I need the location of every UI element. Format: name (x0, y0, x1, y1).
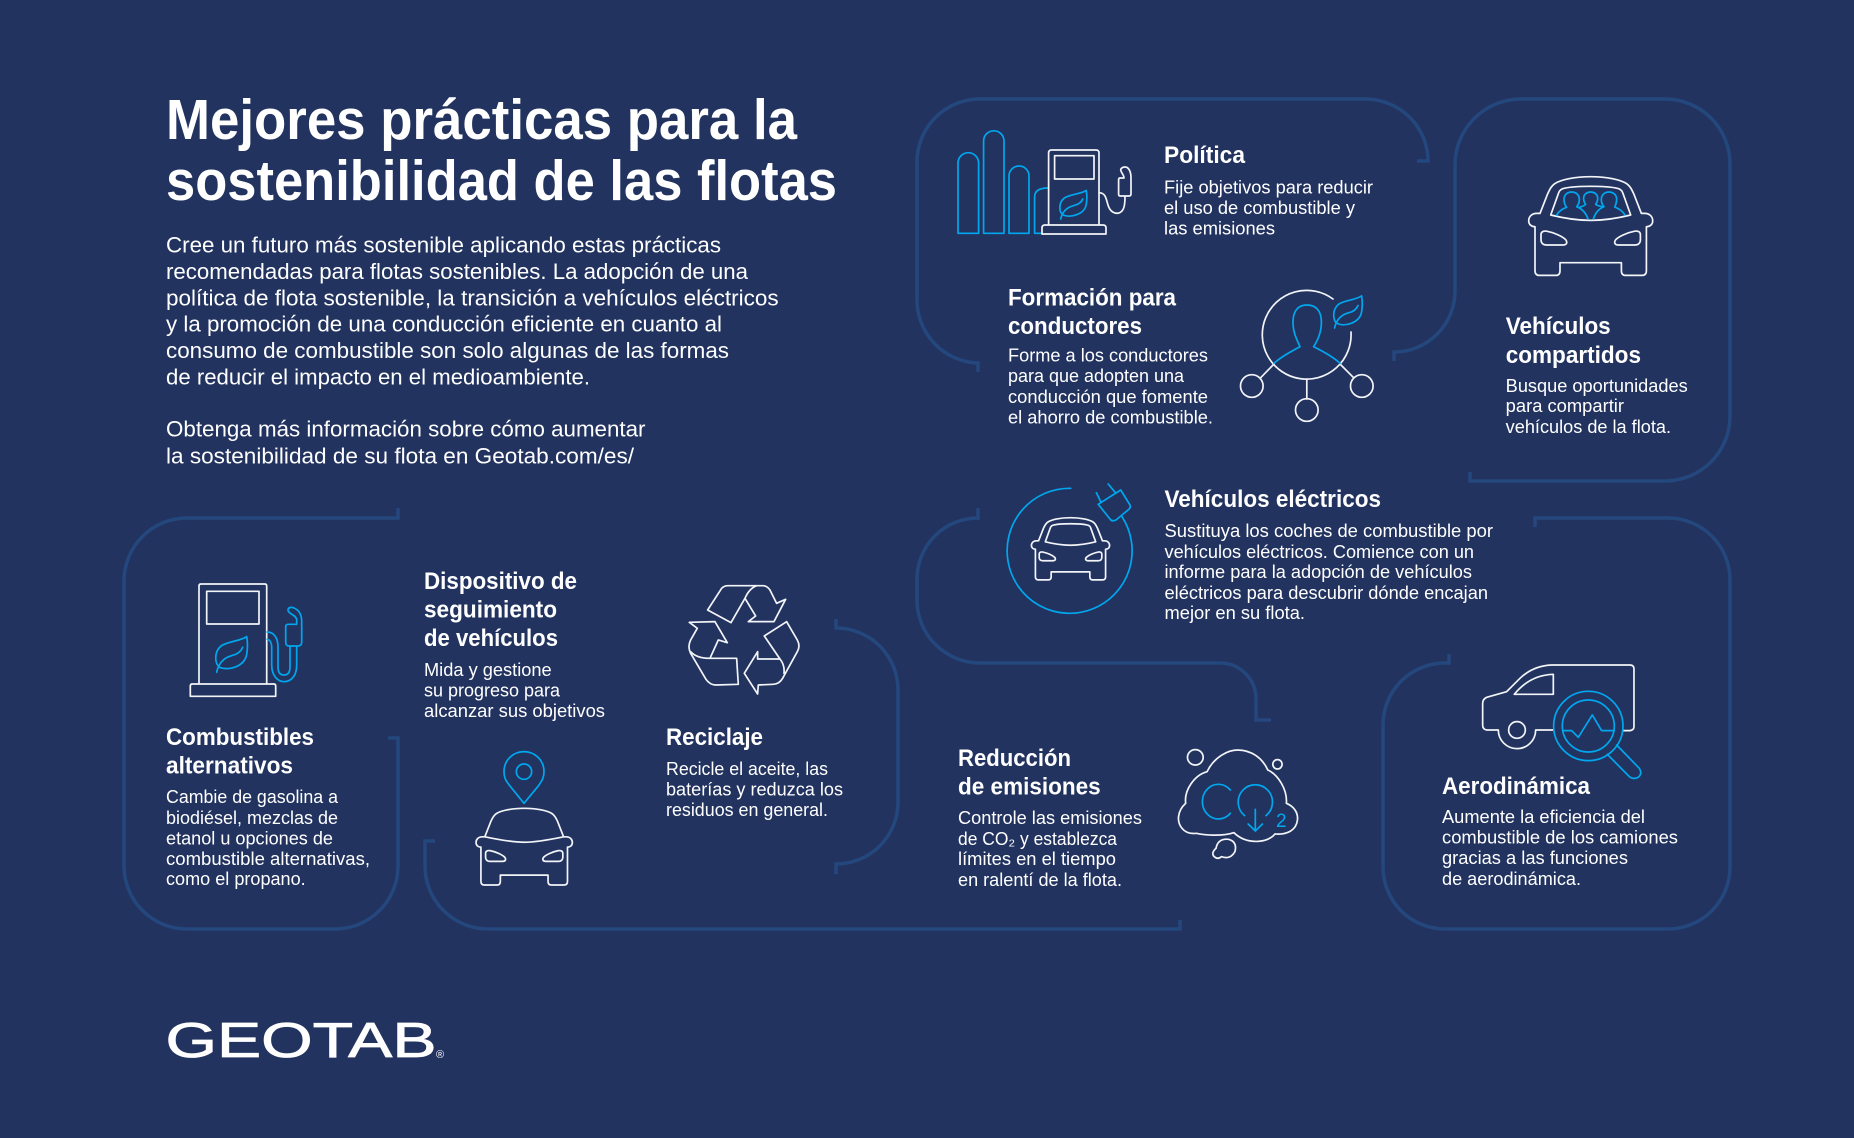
icon: car with location pin (476, 752, 572, 885)
icon: CO2 cloud: 2 (1276, 811, 1287, 832)
body text: límites en el tiempo (958, 849, 1116, 869)
body text (1442, 807, 1678, 889)
body text (1008, 346, 1213, 428)
body text: Cambie de gasolina a (166, 787, 339, 807)
heading (1008, 285, 1177, 340)
panel: combustibles alternativos (166, 584, 370, 889)
body text: etanol u opciones de (166, 828, 333, 848)
body text: su progreso para (424, 680, 561, 700)
body text: mejor en su flota. (1164, 603, 1305, 623)
body text: vehículos eléctricos. Comience con un (1164, 542, 1474, 562)
icon: bars and fuel pump (958, 131, 1131, 234)
intro text block (166, 233, 779, 468)
panel frame: combustibles alternativos (124, 508, 398, 929)
body text: Mida y gestione (424, 660, 552, 680)
body text (424, 660, 605, 721)
intro text block: de reducir el impacto en el medioambiente. (166, 365, 590, 390)
panel: vehículos compartidos (1506, 177, 1688, 437)
heading (958, 745, 1101, 801)
heading: Vehículos (1506, 313, 1611, 340)
panel: aerodinámica (1442, 665, 1678, 889)
intro text block: Obtenga más información sobre cómo aumentar (166, 417, 646, 442)
intro text block: y la promoción de una conducción eficiente en cuanto al (166, 312, 722, 337)
body text: combustible alternativas, (166, 849, 370, 869)
heading: compartidos (1506, 342, 1641, 369)
panel frame: reciclaje, right (836, 619, 898, 874)
icon: recycling arrows (689, 586, 799, 694)
body text (666, 759, 843, 820)
heading: Reciclaje (666, 724, 763, 751)
panel: vehículos eléctricos (1007, 484, 1493, 623)
body text: Controle las emisiones (958, 808, 1142, 828)
intro text block: política de flota sostenible, la transición a vehículos eléctricos (166, 285, 779, 310)
body text: vehículos de la flota. (1506, 417, 1671, 437)
body text: el ahorro de combustible. (1008, 408, 1213, 428)
body text: para que adopten una (1008, 366, 1185, 386)
title: Mejores prácticas para la (166, 88, 798, 152)
panel frame: dispositivo de seguimiento, bottom (425, 841, 1180, 929)
title (166, 88, 837, 213)
panel: reducción de emisiones (958, 745, 1298, 890)
body text: conducción que fomente (1008, 387, 1208, 407)
heading (424, 568, 577, 652)
heading: Aerodinámica (1442, 773, 1591, 800)
icon: truck with magnifier (1483, 665, 1641, 778)
icon: CO2 cloud (1178, 750, 1298, 858)
body text (1164, 178, 1373, 238)
body text: como el propano. (166, 869, 306, 889)
body text: baterías y reduzca los (666, 780, 843, 800)
heading: Combustibles (166, 724, 314, 751)
heading (1506, 313, 1641, 369)
heading: conductores (1008, 313, 1142, 340)
panel frame: vehículos eléctricos and reducción (917, 508, 1271, 720)
body text: Fije objetivos para reducir (1164, 178, 1373, 198)
panel: política (958, 131, 1373, 238)
body text: las emisiones (1164, 218, 1275, 238)
heading: Vehículos eléctricos (1164, 486, 1381, 513)
heading: seguimiento (424, 597, 557, 624)
icon: car with passengers (1529, 177, 1653, 275)
heading: alternativos (166, 753, 293, 780)
heading: Dispositivo de (424, 568, 577, 595)
logo: Geotab: ® (436, 1049, 444, 1061)
body text: de aerodinámica. (1442, 869, 1581, 889)
logo: Geotab: GEOTAB (166, 1014, 436, 1068)
intro text block: consumo de combustible son solo algunas de las formas (166, 338, 729, 363)
title: sostenibilidad de las flotas (166, 149, 837, 213)
icon: driver network (1240, 290, 1373, 421)
panel frame: política and formación (917, 99, 1428, 372)
panel: reciclaje (666, 586, 843, 820)
body text: eléctricos para descubrir dónde encajan (1164, 583, 1488, 603)
body text: para compartir (1506, 396, 1624, 416)
icon: fuel pump with leaf (190, 584, 302, 696)
body text: Sustituya los coches de combustible por (1164, 521, 1493, 541)
heading: Reducción (958, 745, 1071, 772)
panel: dispositivo de seguimiento de vehículos (424, 568, 605, 885)
body text: de CO₂ y establezca (958, 829, 1118, 849)
body text: Recicle el aceite, las (666, 759, 828, 779)
heading: Formación para (1008, 285, 1177, 312)
panel: formación para conductores (1008, 285, 1373, 428)
body text: en ralentí de la flota. (958, 870, 1122, 890)
body text (1506, 376, 1688, 437)
heading (166, 724, 314, 780)
body text: Aumente la eficiencia del (1442, 807, 1645, 827)
panel frame: aerodinámica (1383, 518, 1730, 929)
intro text block: la sostenibilidad de su flota en Geotab.com/es/ (166, 443, 635, 468)
body text (1164, 521, 1493, 623)
body text: el uso de combustible y (1164, 198, 1355, 218)
body text: combustible de los camiones (1442, 828, 1678, 848)
body text: Busque oportunidades (1506, 376, 1688, 396)
body text: biodiésel, mezclas de (166, 808, 338, 828)
icon: electric car with plug (1007, 484, 1132, 613)
body text (958, 808, 1142, 890)
intro text block: recomendadas para flotas sostenibles. La adopción de una (166, 259, 749, 284)
body text: gracias a las funciones (1442, 848, 1628, 868)
heading: Política (1164, 142, 1246, 169)
body text (166, 787, 370, 889)
body text: residuos en general. (666, 800, 828, 820)
panel frame: vehículos compartidos (1394, 99, 1730, 481)
heading: de emisiones (958, 774, 1101, 801)
body text: Forme a los conductores (1008, 346, 1208, 366)
intro text block: Cree un futuro más sostenible aplicando estas prácticas (166, 233, 721, 258)
body text: informe para la adopción de vehículos (1164, 562, 1472, 582)
body text: alcanzar sus objetivos (424, 701, 605, 721)
heading: de vehículos (424, 625, 558, 652)
